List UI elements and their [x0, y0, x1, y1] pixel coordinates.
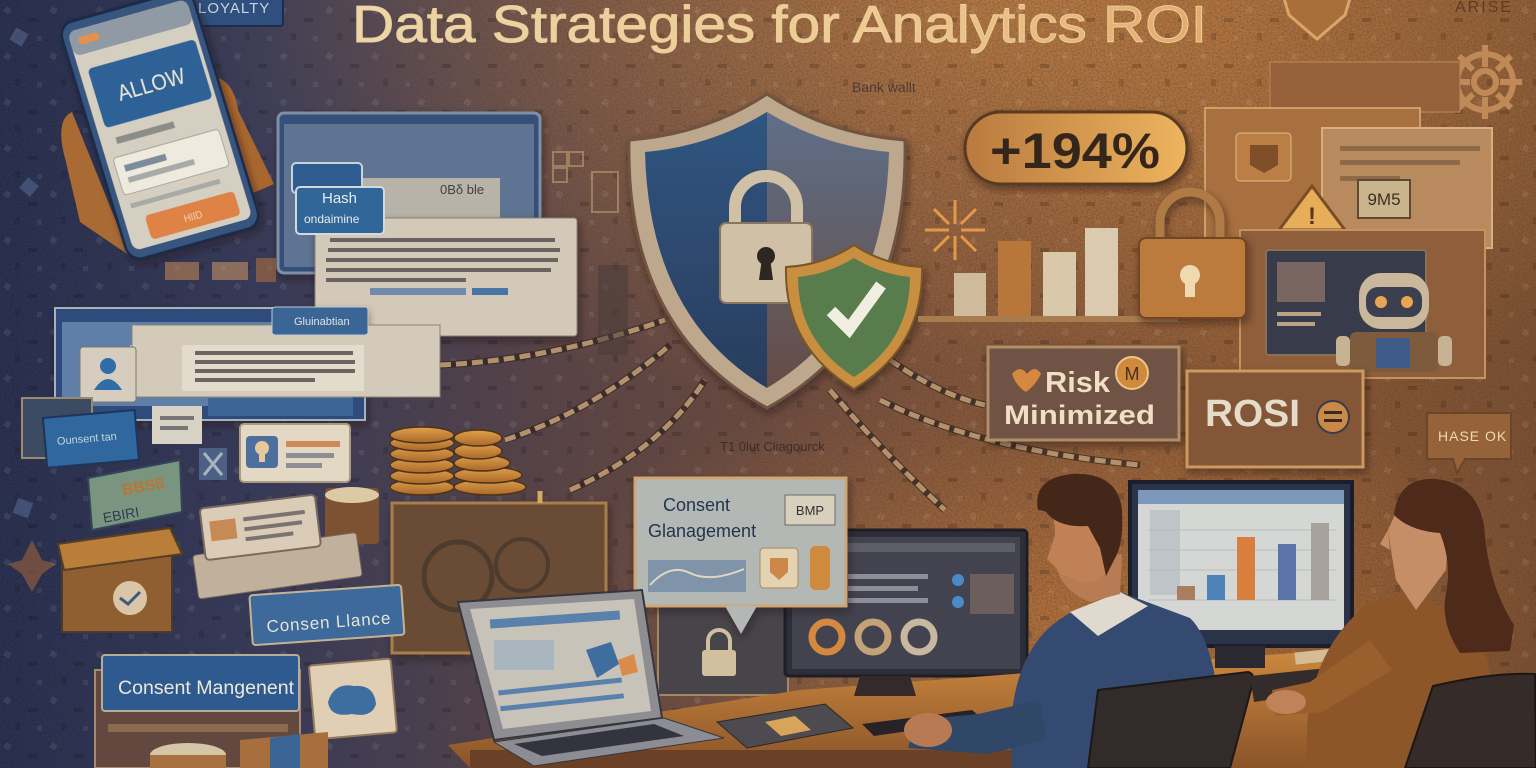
green tag: [88, 460, 182, 530]
panel: right documents: [1205, 62, 1492, 248]
bottom tin boxes: [150, 732, 328, 768]
small grid icons: [553, 152, 618, 212]
tag: 9M5: [1358, 180, 1410, 218]
icon: warning triangle: [1279, 186, 1345, 230]
panel: consent management sign: Consent Mangenent: [118, 678, 295, 699]
woman at desk: [1266, 479, 1514, 768]
monitor with dashboard: [785, 530, 1027, 676]
bubble: HASE OK: [1427, 413, 1511, 473]
icon: cross tile: [199, 448, 227, 480]
label: gluinabtian: Gluinabtian: [294, 316, 350, 328]
icon: sunburst: [925, 200, 985, 260]
label: gluinabtian: [272, 307, 368, 335]
panel: consent management card: [635, 478, 846, 634]
icon: parcel box: [58, 528, 182, 632]
sign: ROSI: ROSI: [1205, 393, 1300, 435]
browser window: [278, 113, 540, 273]
vault panel: [392, 491, 606, 653]
callout: +194%: +194%: [990, 123, 1160, 179]
speech bubble: hash: [292, 163, 384, 234]
desk: [448, 645, 1400, 768]
bar chart: [918, 228, 1178, 322]
panel: consent management sign: [95, 655, 300, 768]
lock card: [240, 424, 350, 482]
decorative tiles: [8, 27, 628, 592]
panel: consent policy text: [315, 218, 577, 336]
icon: orange padlock: [1139, 192, 1246, 318]
icon: coin stacks: [390, 427, 526, 495]
panel: consent management card: Glanagement: [648, 521, 756, 541]
panel: consent management card: BMP: [796, 503, 824, 518]
icon: user card: [80, 347, 136, 402]
sign: risk minimized: Risk: [1045, 367, 1111, 399]
loyalty tag: [183, 0, 283, 26]
panel: profile form: [55, 308, 365, 420]
phone with allow prompt: [58, 0, 274, 262]
bar chart: screen: [1177, 523, 1329, 600]
left stack of tags: [22, 398, 353, 468]
sign: ROSI: [1187, 371, 1363, 467]
speech bubble: hash: Hash: [322, 190, 357, 207]
cards cluster: [193, 487, 379, 599]
label: consent lance: [249, 585, 404, 645]
top right badge icons: [1283, 0, 1513, 39]
speech bubble: hash: ondaimine: [304, 212, 360, 226]
small map card: [309, 658, 397, 739]
green tag: BBS6: [121, 475, 166, 499]
right monitor with chart: [1130, 482, 1352, 668]
panel: policy text two: [132, 325, 440, 397]
sign: risk minimized: [988, 347, 1179, 440]
sign: risk minimized: Minimized: [1004, 400, 1155, 430]
left stack of tags: Ounsent tan: [57, 431, 117, 448]
phone with allow prompt: HIID: [183, 209, 204, 226]
tag: 9M5: 9M5: [1367, 190, 1401, 209]
label: consent lance: Consen Llance: [266, 609, 391, 636]
chair: man: [1088, 672, 1253, 768]
laptop: [458, 590, 724, 766]
panel: consent management card: Consent: [663, 495, 730, 515]
icon: robot: [1336, 273, 1452, 372]
chair: woman: [1405, 674, 1536, 768]
phone with allow prompt: ALLOW: [115, 64, 188, 106]
green tag: EBIRI: [102, 504, 140, 526]
panel: robot screen: [1240, 230, 1485, 378]
tablet on desk: [717, 704, 853, 748]
back screen: lock panel: [658, 590, 788, 695]
keyboard and desk: right: [1250, 646, 1372, 702]
loyalty tag: LOYALTY: [198, 0, 270, 17]
icon: gear: [1448, 45, 1522, 119]
browser window: 0Bδ ble: [440, 182, 484, 197]
bubble: HASE OK: HASE OK: [1438, 428, 1507, 444]
chains: [440, 320, 1140, 510]
icon: warning triangle: !: [1308, 203, 1316, 230]
main shield: [629, 94, 922, 408]
callout: +194%: [965, 112, 1187, 184]
icon: green check shield: [786, 245, 922, 389]
keyboard: [862, 710, 984, 736]
sign: risk minimized: M: [1124, 364, 1140, 384]
text: bank wallet: Bank wallt: [852, 79, 916, 95]
caption: small chain label: T1 0lut Cliagourck: [720, 439, 825, 454]
icon: padlock: [720, 176, 812, 303]
man at desk: [904, 474, 1224, 768]
